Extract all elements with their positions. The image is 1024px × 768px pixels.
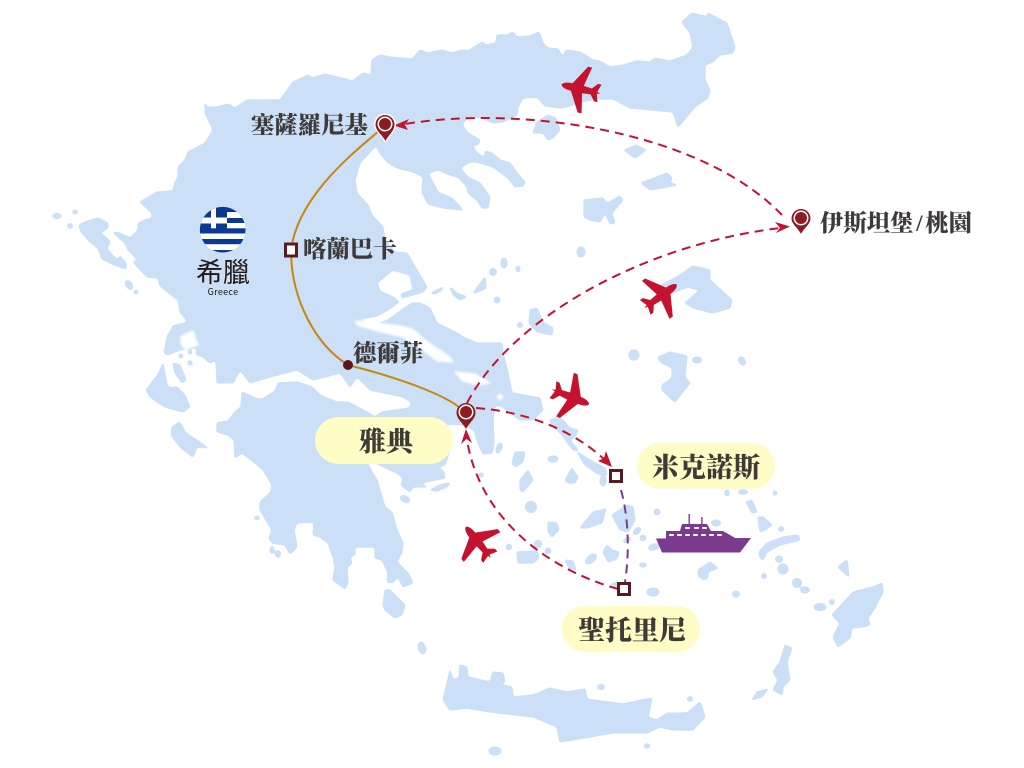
map of Greece — [52, 13, 883, 755]
Peloponnese — [217, 382, 413, 589]
stop marker: Mykonos — [610, 470, 622, 482]
callout: Santorini — [562, 606, 700, 652]
pin: Thessaloniki — [374, 114, 396, 143]
callout: Mykonos: 米克諾斯 — [652, 453, 760, 483]
flight route: Athens to Istanbul — [467, 228, 780, 403]
Greek flag icon — [199, 206, 247, 254]
airplane: north — [556, 62, 606, 117]
stop marker: Santorini — [618, 584, 630, 594]
arrowheads — [394, 119, 790, 467]
callout: Santorini: 聖托里尼 — [578, 615, 686, 646]
flight route: Santorini to Athens — [467, 440, 618, 589]
ferry route (purple) — [621, 490, 628, 582]
ground route (orange) — [291, 130, 460, 408]
callout: Athens — [315, 417, 453, 464]
airplane: southwest — [447, 512, 509, 573]
pin: Istanbul / Taoyuan — [792, 209, 810, 234]
inland sea channels — [181, 321, 502, 400]
label: Thessaloniki: 塞薩羅尼基 — [251, 111, 369, 139]
airplane: central — [543, 368, 598, 426]
stop marker: Kalambaka — [286, 244, 296, 256]
ferry ship icon — [656, 514, 751, 552]
flight route: Istanbul to Thessaloniki — [405, 118, 782, 215]
airplane: east — [631, 266, 691, 327]
stop marker: Delphi — [343, 360, 353, 370]
mainland and Thrace — [113, 13, 735, 454]
country label: Greece: Greece — [208, 285, 238, 298]
country label: Greece: 希臘 — [196, 258, 250, 288]
flight route: Athens to Mykonos — [476, 408, 605, 460]
Saronic peninsula — [377, 450, 450, 492]
pin: Athens — [456, 403, 476, 429]
label: Kalambaka: 喀蘭巴卡 — [303, 235, 397, 263]
callout: Athens: 雅典 — [359, 427, 418, 457]
label: Delphi: 德爾菲 — [353, 339, 423, 367]
label: Istanbul / Taoyuan: 伊斯坦堡/桃園 — [820, 209, 972, 237]
callout: Mykonos — [637, 443, 775, 489]
islands — [52, 115, 883, 755]
